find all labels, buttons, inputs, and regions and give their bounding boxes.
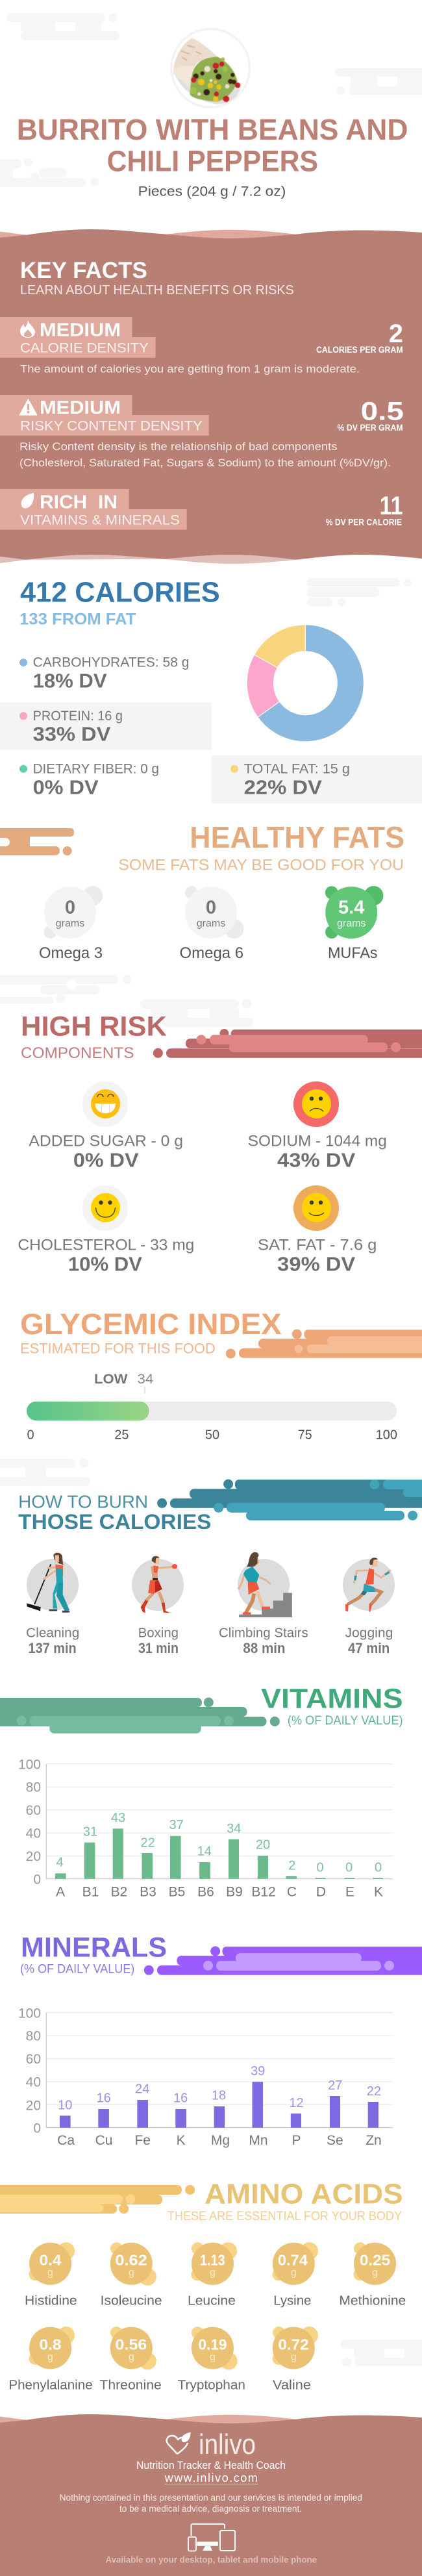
activity: climbing stairs: 88 min	[243, 1640, 286, 1656]
bar chart: minerals: Mn	[249, 2133, 268, 2148]
amino: phenylalanine: g	[47, 2351, 53, 2362]
activity: climbing stairs: Climbing Stairs	[219, 1626, 308, 1641]
mufas: 5.4	[338, 898, 364, 918]
heading: high risk: HIGH RISK	[21, 1011, 167, 1042]
mufas: grams	[337, 918, 366, 929]
amino: threonine: g	[129, 2351, 134, 2362]
cholesterol	[18, 1185, 194, 1275]
legend: protein	[0, 702, 212, 750]
donut chart	[247, 625, 364, 742]
amino: valine	[273, 2327, 318, 2393]
saturated fat: 39% DV	[277, 1253, 356, 1275]
disclaimer: to be a medical advice, diagnosis or treatment.	[119, 2503, 302, 2514]
gauge labels: low 34	[94, 1372, 154, 1394]
amino: isoleucine: g	[129, 2267, 134, 2279]
risky content density row	[0, 395, 404, 469]
panel: healthy fats	[0, 820, 404, 962]
gauge labels: low 34: LOW	[94, 1372, 128, 1387]
tagline: Nutrition Tracker & Health Coach	[136, 2459, 286, 2471]
bar chart: minerals: 40	[26, 2075, 41, 2090]
disclaimer: Nothing contained in this presentation and our services is intended or implied	[60, 2492, 362, 2503]
bar chart: vitamins: 0	[316, 1861, 324, 1875]
activity: jogging	[343, 1558, 395, 1656]
icon: grinning face	[91, 1089, 120, 1118]
risky content density row: RISKY CONTENT DENSITY	[20, 418, 203, 434]
availability note: Available on your desktop, tablet and mobile phone	[105, 2555, 317, 2565]
activity: boxing	[132, 1556, 184, 1656]
bar chart: minerals	[18, 2006, 393, 2148]
legend: carbohydrates: 18% DV	[33, 670, 107, 692]
disclaimer	[60, 2492, 362, 2514]
activity: jogging: 47 min	[348, 1640, 390, 1656]
decorative cloud: top right	[335, 68, 422, 95]
legend: carbohydrates	[19, 655, 190, 692]
bar chart: vitamins: 22	[140, 1836, 155, 1850]
panel: minerals	[18, 1932, 422, 2148]
gauge labels: low 34: 34	[137, 1372, 154, 1387]
website link: www.inlivo.com	[164, 2471, 258, 2484]
activity: cleaning: 137 min	[29, 1640, 77, 1656]
heading: key facts: KEY FACTS	[20, 258, 147, 283]
legend: total fat: TOTAL FAT: 15 g	[244, 762, 350, 777]
bar chart: vitamins: 2	[288, 1858, 295, 1873]
bar chart: vitamins: 4	[56, 1855, 64, 1869]
amino: leucine: Leucine	[188, 2293, 236, 2308]
bar chart: minerals: 16	[96, 2091, 111, 2106]
bar chart: vitamins: 14	[197, 1845, 212, 1859]
bar chart: vitamins: K	[374, 1884, 383, 1899]
header section	[0, 13, 422, 199]
legend: carbohydrates: CARBOHYDRATES: 58 g	[33, 655, 189, 670]
amino: tryptophan: g	[210, 2351, 216, 2362]
amino: threonine: 0.56	[115, 2336, 147, 2353]
bar chart: vitamins: B5	[169, 1884, 185, 1899]
decorative cloud: calories	[307, 578, 412, 607]
legend: protein: PROTEIN: 16 g	[33, 709, 123, 724]
heading: healthy fats: HEALTHY FATS	[190, 820, 404, 854]
bar chart: minerals: K	[177, 2133, 186, 2148]
decorative bars: yellow	[0, 2185, 195, 2214]
panel: calories	[0, 577, 422, 803]
amino: phenylalanine: Phenylalanine	[8, 2379, 93, 2393]
amino: tryptophan: Tryptophan	[178, 2379, 245, 2393]
bar chart: vitamins: 60	[26, 1803, 41, 1818]
decorative bars: purple	[144, 1946, 422, 1975]
amino: tryptophan: 0.19	[199, 2336, 227, 2353]
bar chart: minerals: Ca	[57, 2133, 75, 2148]
cholesterol: CHOLESTEROL - 33 mg	[18, 1236, 194, 1254]
amino: leucine: 1.13	[200, 2252, 225, 2269]
decorative cloud: centre	[140, 1000, 253, 1027]
amino: isoleucine: 0.62	[115, 2252, 147, 2269]
omega 6	[180, 886, 244, 962]
icon: smile face	[302, 1193, 331, 1222]
subheading: components: COMPONENTS	[21, 1044, 134, 1062]
sodium	[248, 1081, 387, 1171]
title	[17, 113, 408, 177]
vitamins and minerals row: VITAMINS & MINERALS	[20, 512, 180, 528]
heading: amino acids: AMINO ACIDS	[205, 2178, 403, 2210]
bar chart: minerals: Mg	[211, 2133, 230, 2148]
amino: lysine: 0.74	[278, 2252, 308, 2269]
activity: boxing: Boxing	[138, 1626, 179, 1641]
icon: sad face	[302, 1089, 331, 1118]
bar chart: vitamins	[18, 1757, 393, 1899]
bar chart: minerals: 80	[26, 2029, 41, 2044]
amino: valine: Valine	[273, 2379, 311, 2393]
bar chart: vitamins: 0	[375, 1861, 382, 1875]
heading: vitamins: VITAMINS	[261, 1683, 403, 1714]
gauge scale: 75	[298, 1428, 312, 1443]
amino: threonine	[99, 2327, 162, 2393]
vitamins and minerals row	[0, 489, 403, 530]
icon: leaf	[21, 493, 34, 508]
decorative bars: orange	[0, 828, 74, 855]
heading: how to burn: HOW TO BURN	[18, 1491, 148, 1511]
decorative bars: green	[0, 1698, 280, 1734]
bar chart: vitamins: 31	[83, 1825, 97, 1839]
activity: jogging: Jogging	[345, 1626, 393, 1641]
calorie density row: CALORIES PER GRAM	[316, 345, 403, 355]
gauge scale: 50	[205, 1428, 219, 1443]
amino: histidine: 0.4	[39, 2252, 62, 2269]
omega 3: Omega 3	[39, 944, 103, 962]
subheading: (% OF DAILY VALUE)	[288, 1713, 403, 1728]
decorative cloud	[340, 2340, 422, 2367]
decorative cloud: top left	[7, 13, 119, 40]
panel: how to burn	[0, 1459, 422, 1656]
subheading: THESE ARE ESSENTIAL FOR YOUR BODY	[168, 2209, 402, 2223]
food photo: burrito	[170, 28, 251, 108]
bar chart: minerals: Se	[327, 2133, 343, 2148]
vitamins and minerals row: % DV PER CALORIE	[326, 517, 402, 527]
decorative cloud: left of title	[0, 158, 99, 187]
logo: inlivo: inlivo	[199, 2429, 256, 2460]
amino: valine: 0.72	[278, 2336, 309, 2353]
icon: warning triangle	[19, 399, 37, 415]
bar chart: vitamins: B1	[82, 1884, 99, 1899]
bar chart: vitamins: 20	[256, 1838, 270, 1852]
title: CHILI PEPPERS	[107, 144, 318, 177]
gauge scale	[27, 1428, 397, 1443]
amino: leucine	[188, 2242, 237, 2308]
subheading: LEARN ABOUT HEALTH BENEFITS OR RISKS	[20, 283, 294, 297]
decorative bars: orange	[226, 1329, 422, 1359]
cholesterol: 10% DV	[68, 1253, 143, 1275]
omega 3: 0	[65, 898, 75, 918]
amino: phenylalanine: 0.8	[39, 2336, 62, 2353]
omega 6: 0	[206, 898, 216, 918]
legend: dietary fiber: DIETARY FIBER: 0 g	[33, 762, 159, 777]
amino: methionine: 0.25	[360, 2252, 390, 2269]
calorie density row: MEDIUM	[40, 320, 121, 340]
amino: isoleucine	[101, 2242, 162, 2308]
bar chart: minerals: 39	[251, 2064, 265, 2078]
omega 6: Omega 6	[180, 944, 243, 962]
mufas	[325, 886, 383, 962]
amino: histidine: g	[47, 2267, 53, 2279]
amino: methionine: Methionine	[339, 2293, 406, 2308]
bar chart: vitamins: 0	[345, 1861, 353, 1875]
amino: methionine: g	[372, 2267, 378, 2279]
decorative bars: red	[153, 1029, 422, 1058]
calorie density row: 2	[389, 320, 403, 348]
bar chart: vitamins: A	[56, 1884, 65, 1899]
bar chart: minerals: 0	[33, 2121, 41, 2136]
heading: calories: 412 CALORIES	[20, 577, 220, 609]
bar chart: vitamins: B3	[140, 1884, 156, 1899]
bar chart: vitamins: 20	[26, 1849, 41, 1864]
legend: total fat: 22% DV	[244, 776, 323, 798]
legend: dietary fiber	[19, 762, 159, 798]
amino: phenylalanine	[8, 2327, 93, 2393]
activity: cleaning	[26, 1553, 79, 1656]
amino: methionine	[339, 2242, 406, 2308]
panel: footer	[0, 2414, 422, 2576]
omega 3: grams	[56, 918, 84, 929]
bar chart: vitamins: 0	[33, 1873, 41, 1888]
risky content density row: MEDIUM	[40, 398, 121, 418]
bar chart: vitamins: 37	[169, 1818, 184, 1832]
calorie density row: The amount of calories you are getting from 1 gram is moderate.	[20, 362, 360, 375]
bar chart: minerals: 27	[328, 2078, 342, 2093]
heading: glycemic index: GLYCEMIC INDEX	[20, 1307, 282, 1341]
title: BURRITO WITH BEANS AND	[17, 113, 408, 146]
heading: minerals: MINERALS	[21, 1932, 167, 1963]
icon: flame	[20, 320, 35, 338]
bar chart: vitamins: 43	[111, 1811, 125, 1825]
activity: climbing stairs	[219, 1552, 308, 1656]
risky content density row: 0.5	[361, 398, 404, 426]
bar chart: minerals: 24	[135, 2082, 149, 2097]
bar chart: vitamins: C	[287, 1884, 297, 1899]
omega 6: grams	[197, 918, 225, 929]
vitamins and minerals row: 11	[380, 492, 403, 520]
bar chart: vitamins: 34	[227, 1822, 241, 1836]
amino: lysine	[273, 2242, 318, 2308]
bar chart: minerals: 60	[26, 2052, 41, 2067]
subheading: ESTIMATED FOR THIS FOOD	[20, 1340, 216, 1356]
panel: glycemic index	[20, 1307, 422, 1443]
amino: lysine: g	[291, 2267, 297, 2279]
bar chart: vitamins: B9	[226, 1884, 243, 1899]
added sugar: 0% DV	[73, 1149, 139, 1171]
sodium: 43% DV	[277, 1149, 356, 1171]
activity: cleaning: Cleaning	[26, 1626, 79, 1641]
added sugar: ADDED SUGAR - 0 g	[29, 1132, 183, 1150]
risky content density row: Risky Content density is the relationship of bad components	[19, 440, 338, 453]
bar chart: minerals: 22	[367, 2084, 381, 2099]
bar chart: minerals: Fe	[134, 2133, 151, 2148]
decorative cloud: left	[0, 975, 132, 1004]
bar chart: vitamins: 80	[26, 1780, 41, 1795]
bar chart: vitamins: B12	[251, 1884, 276, 1899]
bar chart: vitamins: 100	[18, 1757, 41, 1772]
omega 3	[39, 886, 103, 962]
mufas: MUFAs	[328, 944, 378, 962]
amino: valine: g	[291, 2351, 297, 2362]
bar chart: minerals: 10	[58, 2098, 72, 2112]
amino: tryptophan	[178, 2327, 245, 2393]
bar chart: minerals: P	[292, 2133, 301, 2148]
decorative bars: teal	[157, 1480, 422, 1521]
bar chart: minerals: 18	[212, 2089, 226, 2103]
amino: histidine	[25, 2242, 77, 2308]
bar chart: vitamins: D	[316, 1884, 326, 1899]
amino: histidine: Histidine	[25, 2293, 77, 2308]
bar chart: minerals: Cu	[95, 2133, 112, 2148]
panel: amino acids	[0, 2178, 422, 2393]
subheading: (% OF DAILY VALUE)	[20, 1962, 134, 1976]
gauge scale: 0	[27, 1428, 34, 1443]
subheading: SOME FATS MAY BE GOOD FOR YOU	[118, 856, 404, 874]
legend: dietary fiber: 0% DV	[33, 776, 99, 798]
icon: big smile face	[91, 1193, 120, 1222]
heading: those calories: THOSE CALORIES	[18, 1510, 211, 1534]
amino: isoleucine: Isoleucine	[101, 2293, 162, 2308]
icon: devices	[188, 2524, 235, 2551]
panel: key facts	[0, 229, 422, 564]
bar chart: vitamins: E	[345, 1884, 354, 1899]
amino: threonine: Threonine	[99, 2379, 162, 2393]
bar chart: vitamins: B6	[197, 1884, 214, 1899]
saturated fat	[258, 1185, 377, 1275]
bar chart: minerals: 100	[18, 2006, 41, 2021]
bar chart: minerals: 20	[26, 2098, 41, 2113]
saturated fat: SAT. FAT - 7.6 g	[258, 1236, 377, 1254]
legend: protein: 33% DV	[33, 723, 111, 745]
bar chart: minerals: 16	[173, 2091, 188, 2106]
bar chart: vitamins: 40	[26, 1826, 41, 1841]
panel: high risk	[0, 975, 422, 1275]
subheading: from fat: 133 FROM FAT	[19, 611, 136, 629]
amino: lysine: Lysine	[273, 2293, 311, 2308]
calorie density row	[0, 317, 403, 375]
gauge scale: 100	[376, 1428, 397, 1443]
panel: vitamins	[0, 1683, 403, 1899]
bar chart: minerals: Zn	[366, 2133, 382, 2148]
activity: boxing: 31 min	[138, 1640, 179, 1656]
gauge scale: 25	[114, 1428, 129, 1443]
added sugar	[29, 1081, 183, 1171]
glycemic gauge	[27, 1402, 397, 1421]
bar chart: vitamins: B2	[111, 1884, 127, 1899]
calorie density row: CALORIE DENSITY	[20, 340, 149, 356]
decorative cloud	[0, 1459, 90, 1486]
amino: leucine: g	[210, 2267, 216, 2279]
risky content density row: % DV PER GRAM	[338, 423, 403, 433]
legend: total fat	[212, 755, 422, 803]
serving size: Pieces (204 g / 7.2 oz)	[138, 184, 286, 199]
bar chart: minerals: 12	[289, 2096, 304, 2110]
risky content density row: (Cholesterol, Saturated Fat, Sugars & Sodium) to the amount (%DV/gr).	[19, 457, 391, 469]
vitamins and minerals row: RICH IN	[40, 492, 118, 513]
sodium: SODIUM - 1044 mg	[248, 1132, 387, 1150]
logo: inlivo	[167, 2429, 256, 2460]
